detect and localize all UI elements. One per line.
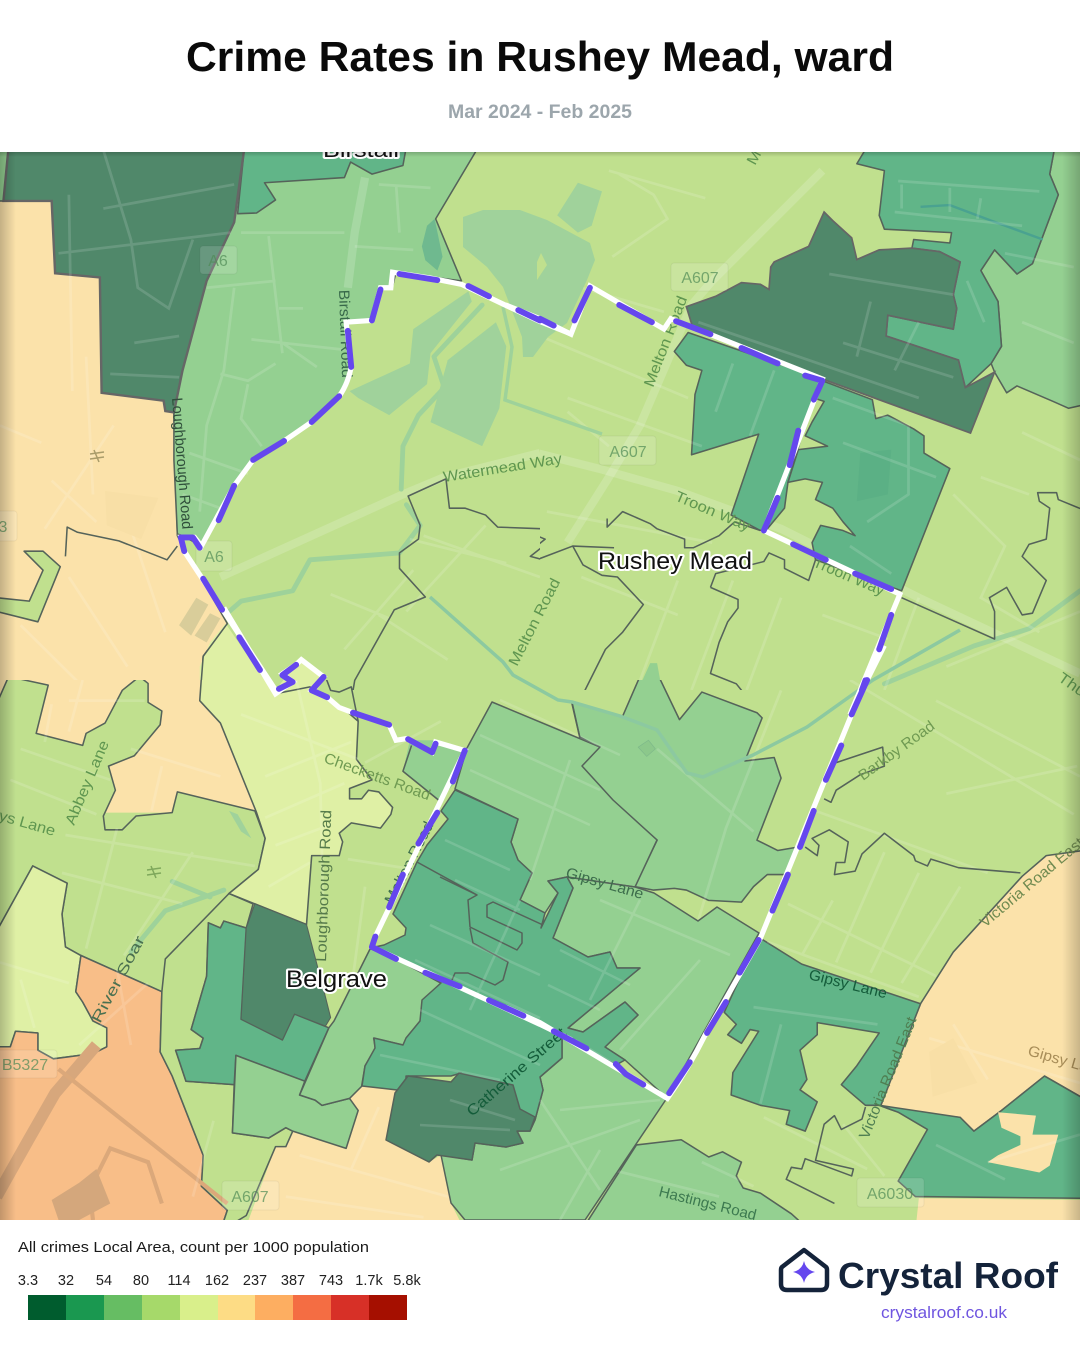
legend: scale values: 5.8k	[393, 1273, 421, 1289]
road shields	[0, 246, 924, 1210]
road name labels: Melton Road	[381, 819, 437, 907]
ward boundary: Rushey Mead dashed outline	[181, 272, 900, 1098]
map edge shading	[0, 152, 1080, 1220]
map area: north-east neighbourhoods	[540, 152, 1080, 690]
road name labels: Catherine Street	[463, 1024, 570, 1120]
road shields: A607	[231, 1189, 269, 1206]
road name labels: Gipsy Lane	[807, 966, 889, 1002]
legend: scale values	[18, 1273, 421, 1289]
road shields: B5327	[2, 1057, 48, 1074]
road name labels: Troon Way	[672, 488, 753, 535]
legend: scale values: 1.7k	[355, 1273, 383, 1289]
road shields: A6	[208, 253, 228, 270]
road name labels: Melton Road	[505, 576, 564, 669]
road name labels: Victoria Road East	[856, 1014, 921, 1141]
legend: scale values: 80	[133, 1273, 149, 1289]
map area: central neighbourhoods and park lake	[362, 210, 960, 1220]
road shields: A6	[204, 549, 224, 566]
place label: Birstall: Birstall	[323, 139, 399, 162]
legend: colour scale	[28, 1295, 407, 1320]
map area: north-west neighbourhoods	[0, 152, 540, 690]
road name labels: River Soar	[89, 933, 149, 1026]
subtitle: date range: Mar 2024 - Feb 2025	[448, 102, 632, 123]
road name labels: Gipsy Lane	[564, 865, 645, 903]
legend: scale values: 387	[281, 1273, 305, 1289]
road name labels: Hastings Road	[657, 1183, 758, 1224]
place label: Belgrave: Belgrave	[286, 966, 387, 993]
legend: scale values: 114	[167, 1273, 191, 1289]
legend: scale values: 237	[243, 1273, 267, 1289]
road name labels: Loughborough Road	[313, 810, 335, 962]
icon: house with star	[781, 1250, 827, 1290]
legend: scale values: 32	[58, 1273, 74, 1289]
road name labels: Melton Road	[641, 294, 691, 389]
legend: scale values: 54	[96, 1273, 112, 1289]
road name labels: Melton Road	[744, 75, 804, 168]
title: Crime Rates in Rushey Mead, ward	[186, 33, 894, 80]
map area: south-east neighbourhoods	[571, 680, 1080, 1220]
website link: crystalroof.co.uk	[881, 1304, 1008, 1322]
map area: south-west neighbourhoods	[0, 680, 461, 1220]
road name labels: Watermead Way	[442, 450, 564, 486]
road shields: A6030	[867, 1186, 913, 1203]
road name labels: Checketts Road	[322, 750, 433, 804]
icon: railway station symbols	[90, 450, 161, 878]
road shields: A607	[609, 444, 647, 461]
road name labels: Troon Way	[810, 554, 888, 600]
logo: Crystal Roof	[781, 1250, 1059, 1296]
legend title: All crimes Local Area, count per 1000 population	[18, 1239, 369, 1256]
road name labels: Victoria Road East	[977, 834, 1080, 931]
place label: Rushey Mead: Rushey Mead	[598, 548, 752, 575]
legend: scale values: 3.3	[18, 1273, 38, 1289]
legend: scale values: 162	[205, 1273, 229, 1289]
road name labels: Barkby Road	[855, 718, 938, 784]
logo: Crystal Roof: Crystal Roof	[838, 1255, 1059, 1296]
road name labels: Birstall Road	[335, 290, 355, 378]
road shields: A607	[681, 270, 719, 287]
road name labels: Abbey Lane	[62, 738, 113, 828]
legend: scale values: 743	[319, 1273, 343, 1289]
road name labels: Loughborough Road	[168, 397, 195, 530]
